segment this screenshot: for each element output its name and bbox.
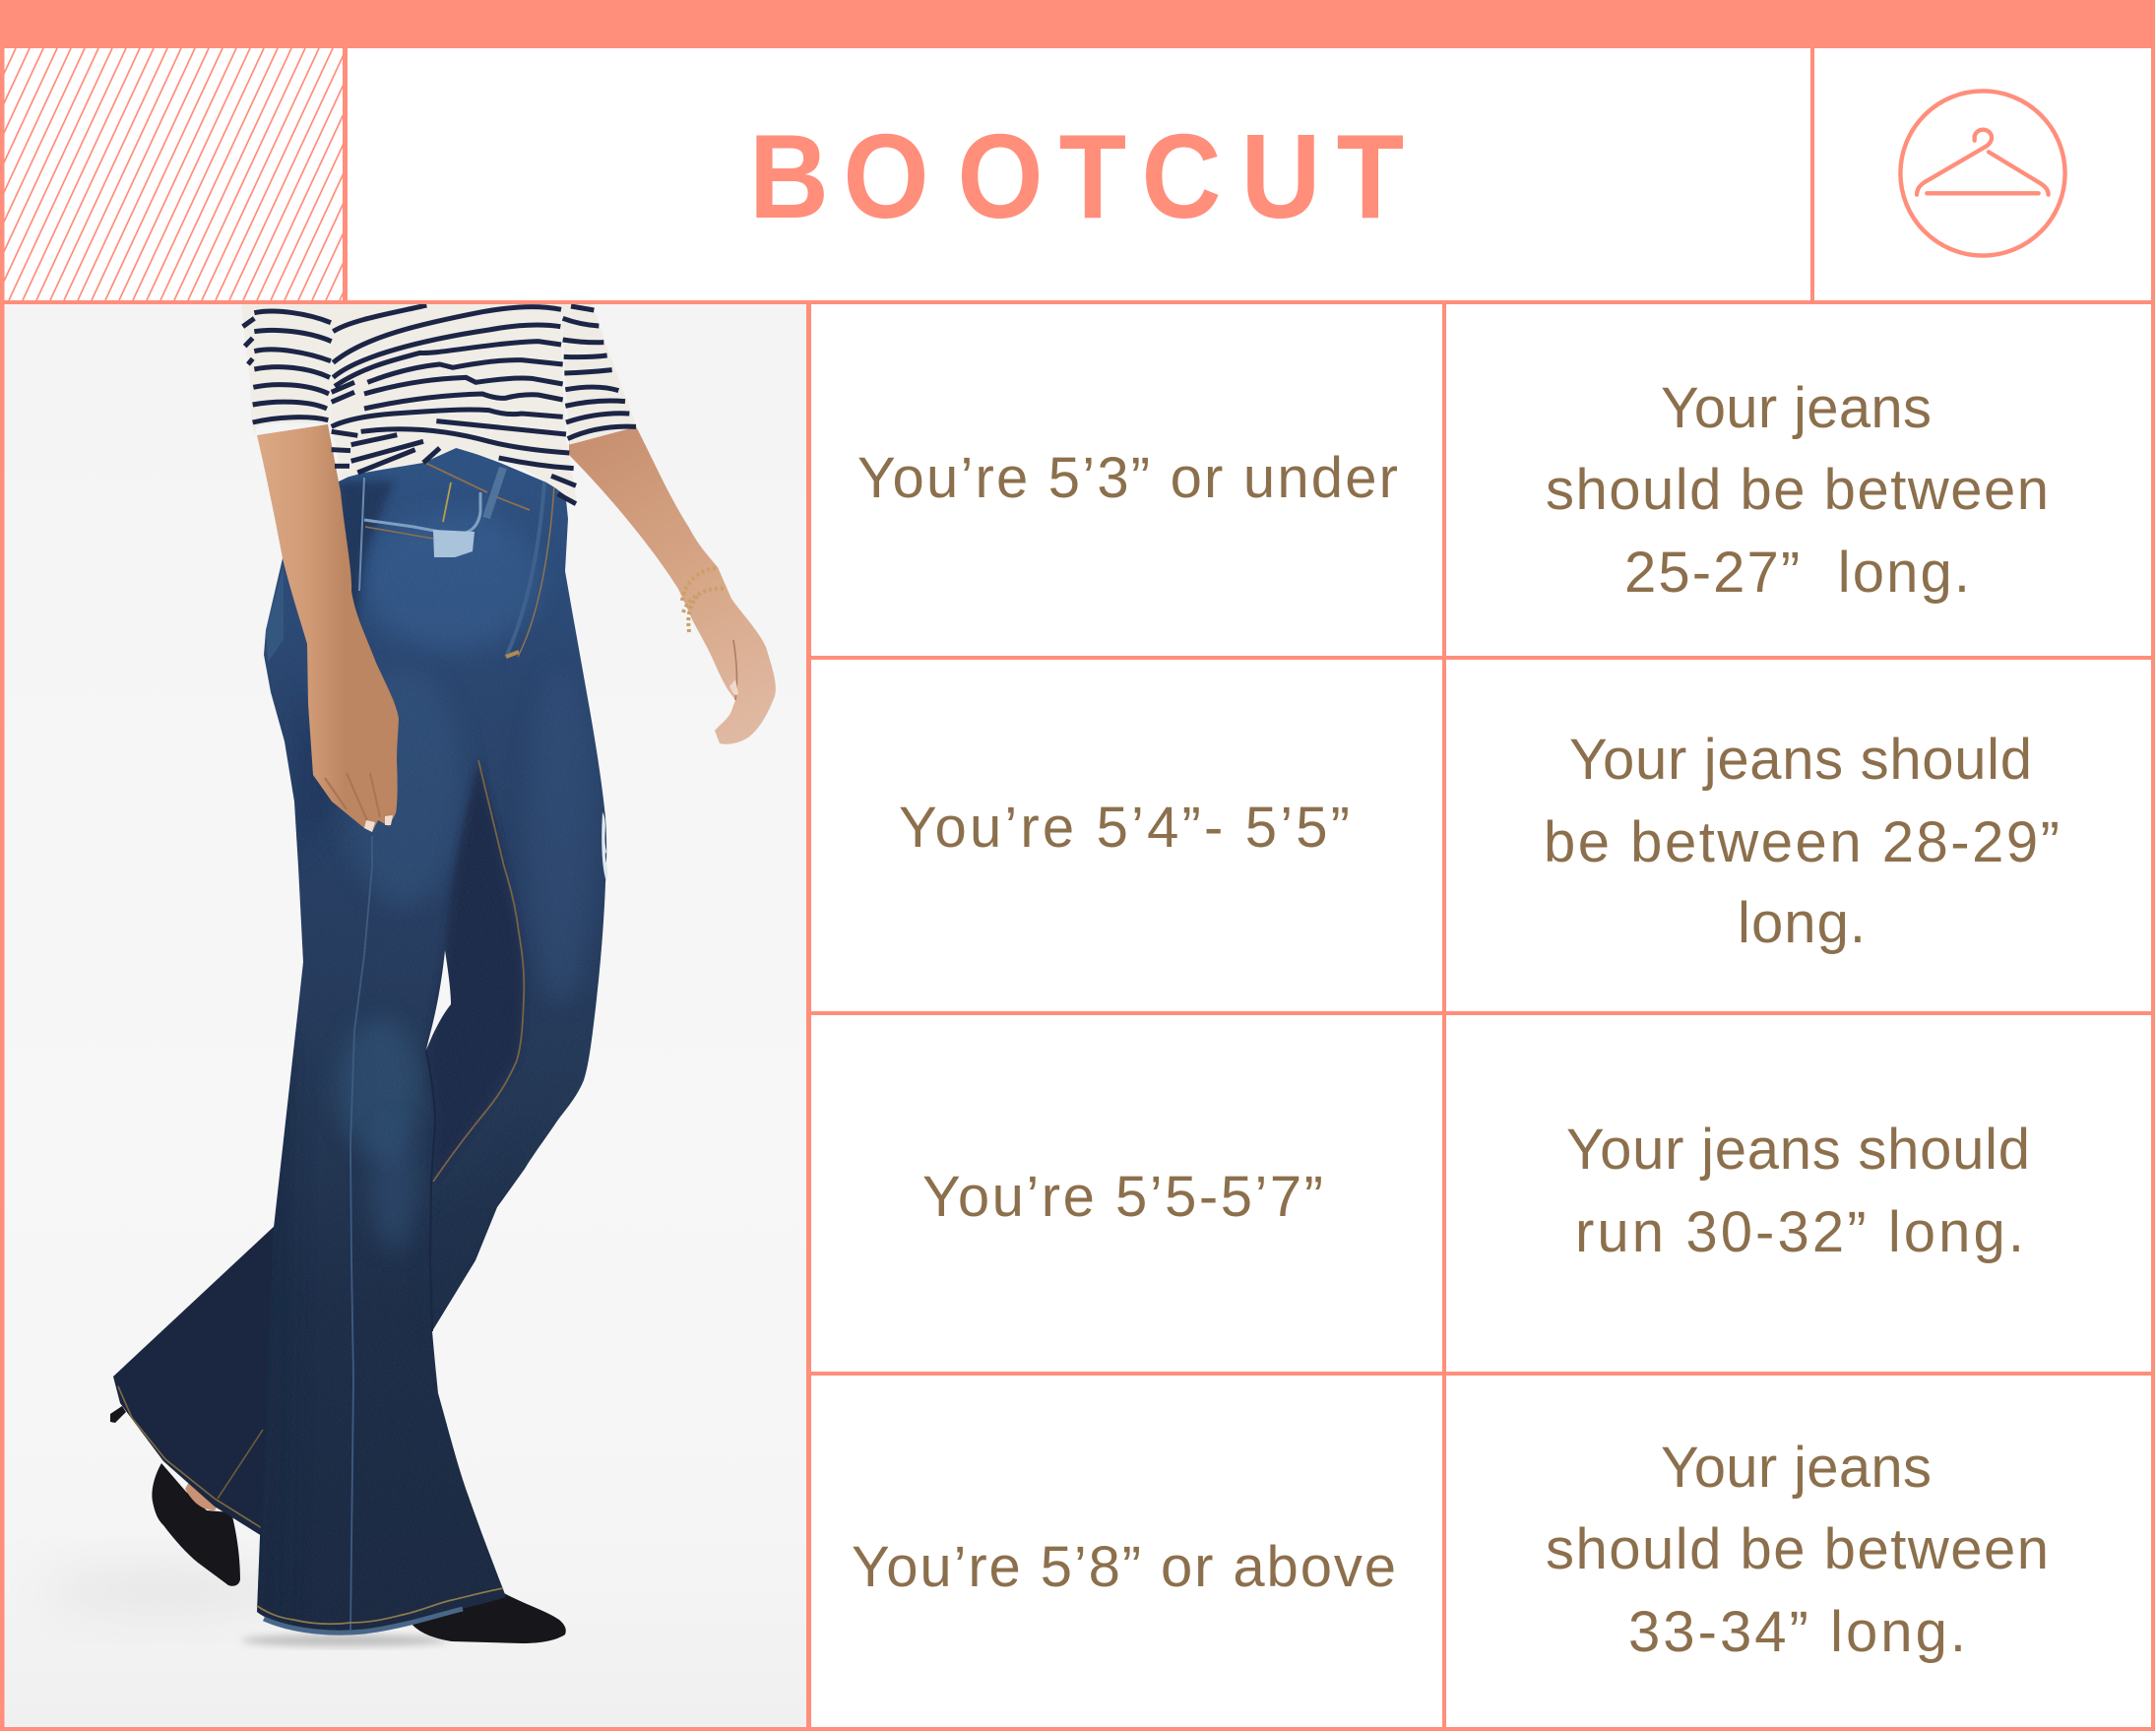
gap between legs <box>426 950 451 1050</box>
photo backdrop <box>4 304 806 1727</box>
distressed pocket patch <box>433 530 475 557</box>
left sleeve <box>241 304 332 435</box>
row 4: inseam: Your jeans <box>1661 1436 1932 1500</box>
jeans main silhouette <box>257 445 606 1634</box>
row 1: height: You’re 5’3” or under <box>857 446 1398 510</box>
right arm and hand <box>569 426 776 744</box>
row 2: inseam <box>1544 728 2060 955</box>
row 1: inseam: should be between <box>1546 458 2049 522</box>
floor shadows <box>95 1576 447 1650</box>
frame: top bar <box>0 0 2155 48</box>
panel: diagonal hatch <box>4 48 343 300</box>
title: BOOTCUT <box>749 109 1404 243</box>
distressed knee rip <box>602 812 607 881</box>
row 3: inseam: run 30-32” long. <box>1575 1200 2024 1264</box>
row 1: inseam <box>1546 376 2049 605</box>
back pocket edge <box>266 566 284 662</box>
row 1: inseam: Your jeans <box>1661 376 1932 440</box>
striped shirt <box>241 304 637 504</box>
row 3: height: You’re 5’5-5’7” <box>922 1165 1323 1229</box>
row 2: inseam: be between 28-29” <box>1544 810 2060 874</box>
row 3: inseam <box>1566 1118 2030 1264</box>
row 4: inseam: 33-34” long. <box>1628 1600 1966 1664</box>
front shoe <box>411 1593 566 1643</box>
row 3: inseam: Your jeans should <box>1566 1118 2030 1182</box>
jeans stitching and details <box>257 463 554 1633</box>
right sleeve <box>561 304 637 445</box>
row 4: height: You’re 5’8” or above <box>852 1535 1396 1599</box>
back shoe <box>110 1406 240 1586</box>
front pocket <box>364 492 480 535</box>
row 2: height: You’re 5’4”- 5’5” <box>899 796 1350 860</box>
row 1: inseam: 25-27” long. <box>1624 541 1970 605</box>
panel: photo of model in bootcut jeans <box>4 304 806 1727</box>
back jeans leg <box>113 1224 285 1536</box>
left arm and hand <box>257 424 399 832</box>
jeans shading <box>251 443 610 1639</box>
shirt body <box>331 304 577 504</box>
row 2: inseam: long. <box>1738 891 1866 955</box>
denim grain <box>261 486 584 1627</box>
icon: hanger in circle <box>1900 91 2065 256</box>
row 4: inseam: should be between <box>1546 1517 2049 1581</box>
bracelets <box>682 569 726 632</box>
row 4: inseam <box>1546 1436 2049 1664</box>
row 2: inseam: Your jeans should <box>1569 728 2032 792</box>
